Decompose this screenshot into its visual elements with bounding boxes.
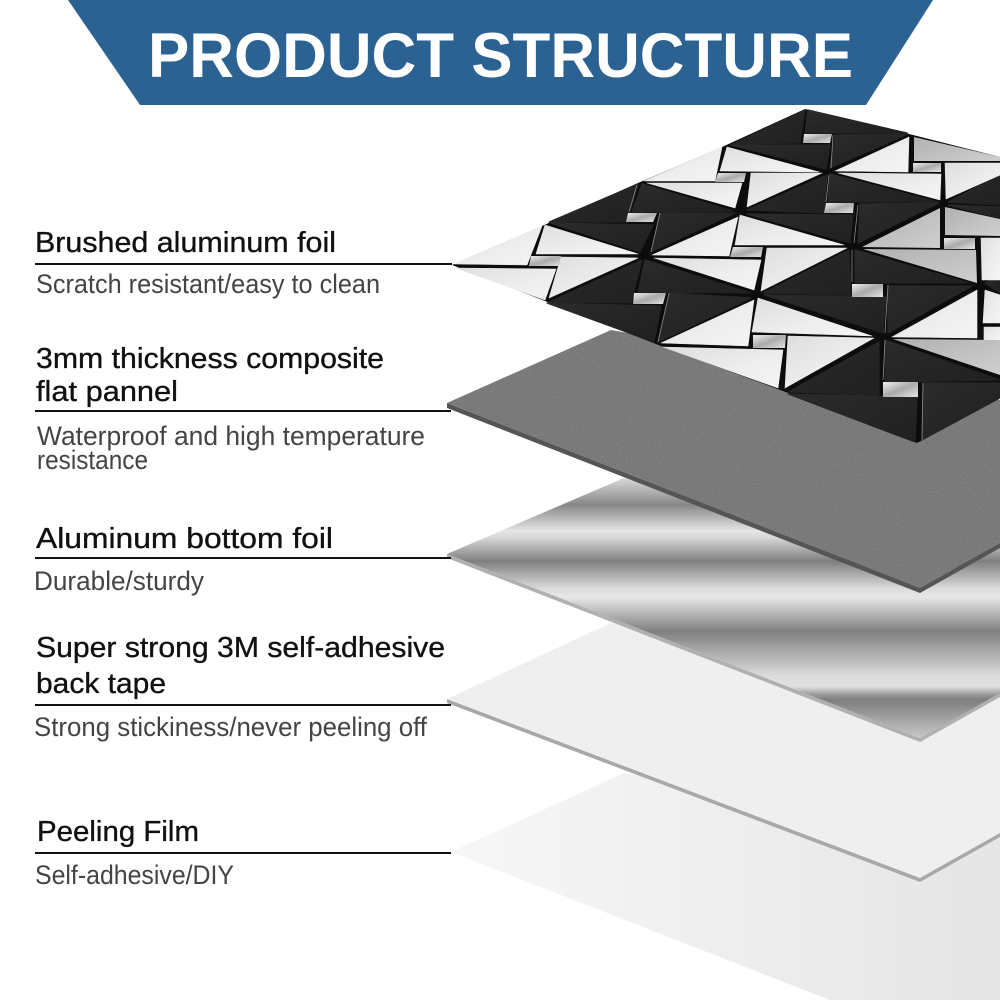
label: aluminum bottom foil: Aluminum bottom foil <box>36 523 333 555</box>
label: peeling film <box>35 816 451 890</box>
label: back tape: Super strong 3M self-adhesive <box>36 632 445 664</box>
label: back tape: Strong stickiness/never peeling off <box>34 712 427 742</box>
label: aluminum bottom foil: Durable/sturdy <box>34 566 204 596</box>
label: composite flat panel <box>35 343 451 475</box>
grey brushed aluminum tiles <box>862 137 1000 375</box>
label: composite flat panel: resistance <box>37 445 148 475</box>
layer: brushed aluminum mosaic foil <box>452 109 1000 443</box>
bright seam slivers on dark tiles <box>629 135 923 440</box>
light brushed aluminum tiles <box>454 137 1000 388</box>
title text: PRODUCT STRUCTURE <box>148 21 853 91</box>
label: back tape: back tape <box>36 668 166 700</box>
title banner <box>68 0 933 105</box>
label: peeling film: Peeling Film <box>37 816 199 848</box>
label: composite flat panel: Waterproof and high temperature <box>37 421 425 451</box>
label: peeling film: Self-adhesive/DIY <box>35 860 234 890</box>
label: composite flat panel: flat pannel <box>36 376 178 408</box>
label: aluminum bottom foil <box>34 523 451 596</box>
dark mosaic tiles <box>547 110 1000 442</box>
layer: composite flat panel <box>447 330 1000 593</box>
layer: aluminum bottom foil <box>447 478 1000 742</box>
mirror square tiles <box>529 134 975 397</box>
layer: peeling film <box>451 773 1000 1000</box>
label: brushed aluminum foil: Scratch resistant/easy to clean <box>36 269 380 299</box>
label: brushed aluminum foil <box>35 227 452 299</box>
label: back tape <box>34 632 451 742</box>
label: brushed aluminum foil: Brushed aluminum foil <box>35 227 336 259</box>
layer: self-adhesive back tape <box>447 623 1000 882</box>
label: composite flat panel: 3mm thickness composite <box>36 343 384 375</box>
